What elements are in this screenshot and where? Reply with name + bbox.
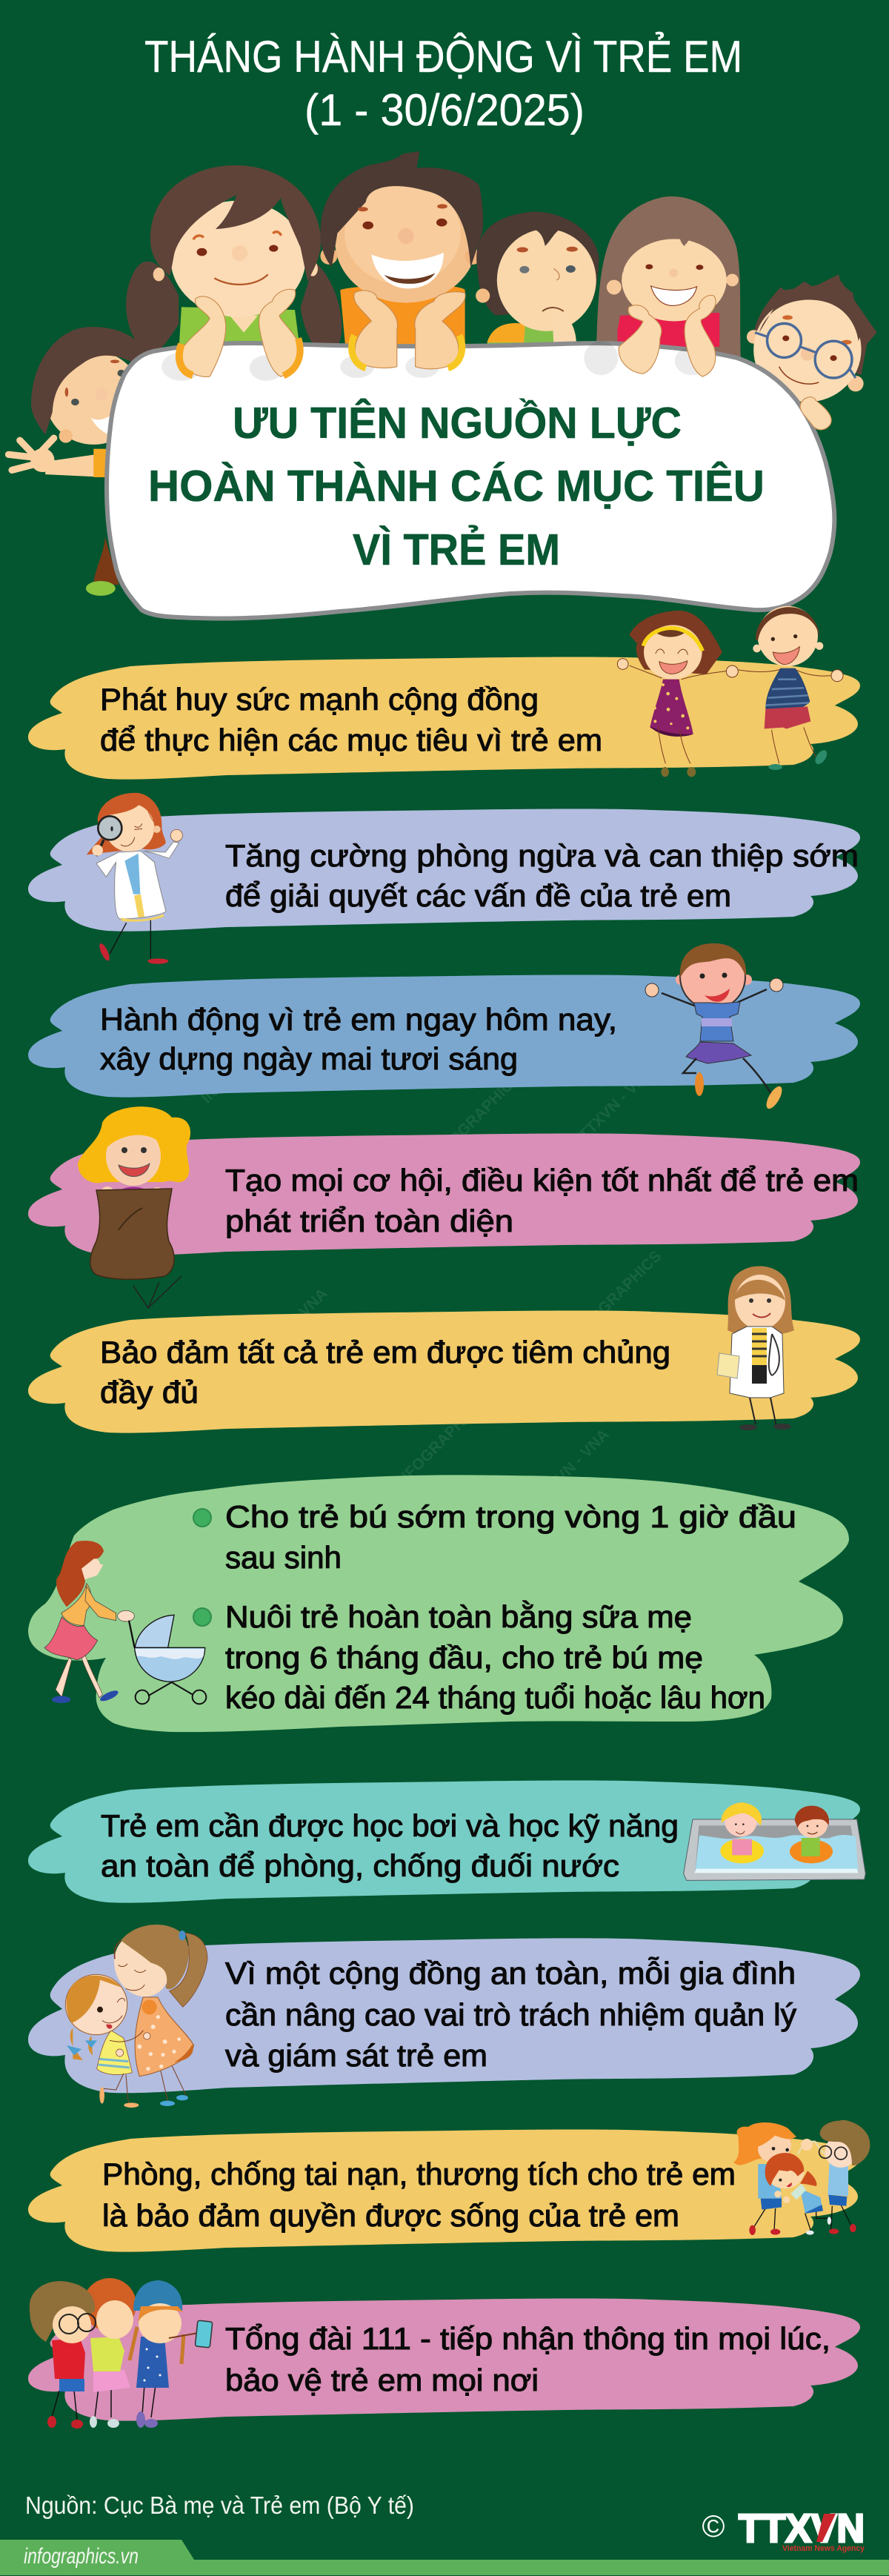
icon: girl doctor with magnifying glass [87, 793, 182, 964]
panel: comprehensive development [28, 1106, 860, 1308]
heading [148, 398, 765, 574]
text: để thực hiện các mục tiêu vì trẻ em [100, 723, 602, 757]
text [225, 1956, 796, 2073]
text [225, 1163, 859, 1238]
text: Vì một cộng đồng an toàn, mỗi gia đình [225, 1956, 796, 1991]
logo: TTXVN: Vietnam News Agency [782, 2544, 865, 2553]
text [102, 2157, 736, 2233]
text: INFOGRAPHICS [568, 1247, 665, 1344]
icon: children in swimming pool [684, 1802, 865, 1880]
heading: HOÀN THÀNH CÁC MỤC TIÊU [148, 461, 765, 511]
bullet list: Nuôi trẻ hoàn toàn bằng sữa mẹ [225, 1599, 692, 1634]
heading: ƯU TIÊN NGUỒN LỰC [233, 398, 682, 448]
title [144, 32, 742, 135]
text: INFOGRAPHICS [390, 1395, 487, 1493]
bullet list: trong 6 tháng đầu, cho trẻ bú mẹ [225, 1640, 703, 1675]
title: (1 - 30/6/2025) [304, 85, 585, 135]
panel: swimming and drowning prevention [28, 1780, 865, 1903]
text: đầy đủ [100, 1375, 199, 1410]
text: bảo vệ trẻ em mọi nơi [225, 2363, 539, 2397]
icon: woman doctor [717, 1266, 794, 1430]
text: xây dựng ngày mai tươi sáng [100, 1041, 518, 1076]
text: Phát huy sức mạnh cộng đồng [100, 682, 539, 717]
bullet list: Cho trẻ bú sớm trong vòng 1 giờ đầu [225, 1499, 796, 1534]
logo: TTXVN: © [702, 2509, 725, 2543]
icon: girl in a sack [78, 1106, 190, 1308]
panel: full vaccination [28, 1266, 860, 1433]
text: TTXVN - VNA [576, 1063, 657, 1144]
panel: white heading board [107, 343, 834, 619]
panel: community strength [28, 606, 860, 780]
text: Tăng cường phòng ngừa và can thiệp sớm [225, 838, 859, 873]
text [100, 1335, 670, 1410]
text: phát triển toàn diện [225, 1204, 513, 1238]
panel: family responsibility [28, 1925, 860, 2108]
bullet list: sau sinh [225, 1540, 342, 1575]
text [225, 838, 859, 913]
icon: jumping boy [645, 943, 785, 1111]
text: TTXVN - VNA [250, 1285, 331, 1367]
illustration: group of children behind the board [8, 151, 483, 596]
footer bar: infographics.vn [24, 2544, 139, 2569]
text [100, 1002, 617, 1076]
panel: act today [28, 943, 860, 1111]
text: Hành động vì trẻ em ngay hôm nay, [100, 1002, 617, 1037]
text: để giải quyết các vấn đề của trẻ em [225, 878, 731, 913]
panel: hotline 111 [28, 2278, 860, 2429]
text: TTXVN - VNA [531, 1426, 613, 1507]
text: và giám sát trẻ em [225, 2038, 487, 2073]
text: Bảo đảm tất cả trẻ em được tiêm chủng [100, 1335, 670, 1370]
footer bar [0, 2540, 889, 2575]
icon: mother hugging daughter [65, 1925, 207, 2108]
text: an toàn để phòng, chống đuối nước [101, 1848, 619, 1883]
heading: VÌ TRẺ EM [353, 525, 560, 574]
title: THÁNG HÀNH ĐỘNG VÌ TRẺ EM [144, 32, 742, 82]
text: Tổng đài 111 - tiếp nhận thông tin mọi lúc, [225, 2321, 830, 2356]
icon: mother with baby stroller [44, 1541, 206, 1704]
text [225, 2321, 830, 2397]
panel: early prevention [28, 793, 860, 964]
text: INFOGRAPHICS [198, 1010, 294, 1107]
text: INFOGRAPHICS [427, 1069, 524, 1166]
icon: two children holding hands [617, 606, 843, 777]
source note: Nguồn: Cục Bà mẹ và Trẻ em (Bộ Y tế) [25, 2492, 414, 2519]
text: Phòng, chống tai nạn, thương tích cho trẻ em [102, 2157, 736, 2191]
bullet list [193, 1499, 796, 1715]
icon: three playing children [733, 2120, 870, 2235]
text: TTXVN - VNA [383, 1322, 465, 1404]
text: Tạo mọi cơ hội, điều kiện tốt nhất để trẻ em [225, 1163, 859, 1198]
illustration: children's hands resting on the board [162, 289, 709, 381]
logo: TTXVN: TTXVN [739, 2506, 865, 2551]
text [100, 682, 602, 757]
text: là bảo đảm quyền được sống của trẻ em [102, 2198, 679, 2233]
icon: three children with phone [30, 2278, 213, 2429]
bullet list: kéo dài đến 24 tháng tuổi hoặc lâu hơn [225, 1680, 765, 1715]
text: cần nâng cao vai trò trách nhiệm quản lý [225, 1997, 796, 2032]
text: Trẻ em cần được học bơi và học kỹ năng [101, 1808, 679, 1843]
text [101, 1808, 679, 1883]
panel: injury prevention [28, 2120, 870, 2252]
panel: breastfeeding [28, 1475, 849, 1732]
